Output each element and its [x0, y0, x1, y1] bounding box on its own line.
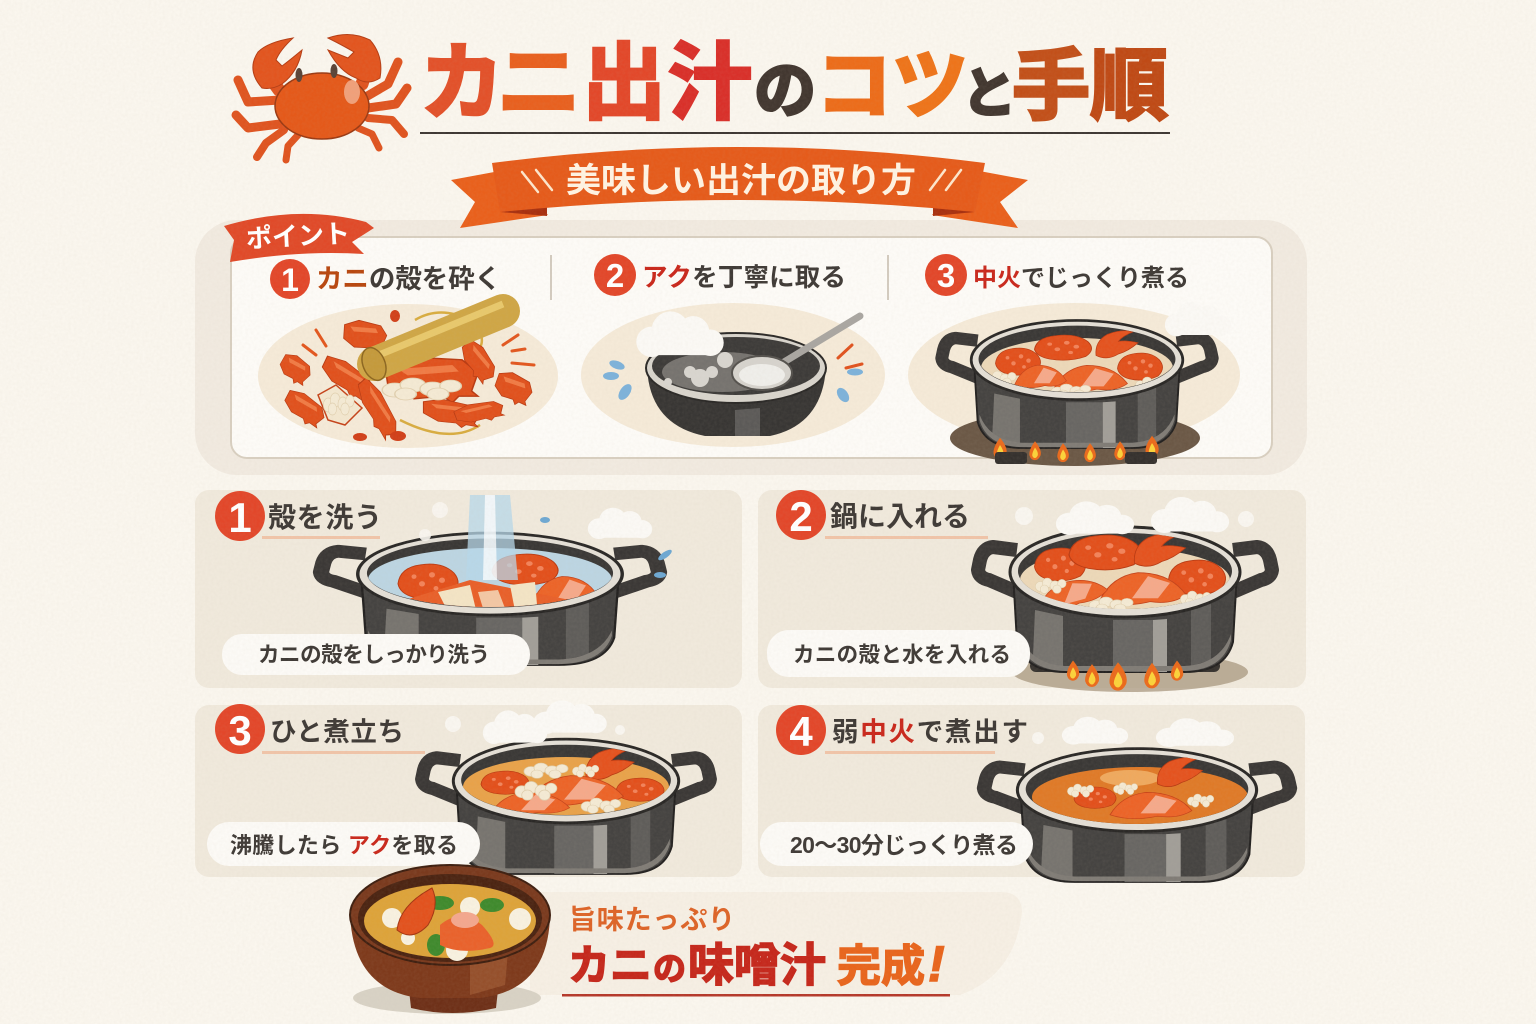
completed heading: 味噌汁: [688, 939, 826, 991]
step title: 弱中火で煮出す: [832, 717, 1028, 747]
underline: [562, 994, 950, 996]
step number: [776, 705, 826, 755]
point 3 illustration: simmering pot: [908, 302, 1240, 466]
icon: crab: [236, 34, 407, 160]
title: コ: [816, 44, 892, 129]
step number: 4: [789, 708, 813, 755]
step title: 鍋に入れる: [830, 501, 970, 532]
caption pill: カニの殻と水を入れる: [793, 643, 1011, 667]
title: 汁: [668, 36, 752, 130]
card: step 3: [195, 700, 742, 877]
panel: finished miso soup: [530, 892, 1022, 996]
point 2 illustration: skimming: [581, 303, 885, 447]
icon: miso soup bowl: [350, 865, 550, 1014]
point 2 heading: アクを丁寧に取る: [642, 264, 846, 292]
illustration: pot on burner: [978, 497, 1272, 692]
underline: [825, 751, 995, 754]
step title: 殻を洗う: [268, 502, 382, 533]
panel: points: [195, 214, 1307, 475]
underline: [262, 536, 380, 539]
underline: [825, 536, 988, 539]
step title: ひと煮立ち: [270, 717, 404, 747]
title: [420, 36, 1168, 130]
step number: 3: [228, 707, 252, 754]
card: step 4: [758, 705, 1305, 882]
completed heading: カニ: [568, 942, 652, 989]
caption pill: カニの殻をしっかり洗う: [258, 643, 490, 667]
illustration: simmering broth: [984, 717, 1290, 882]
point 2 heading: [594, 254, 846, 296]
illustration: boiling pot: [422, 700, 710, 874]
point 2 heading: 2: [606, 257, 624, 294]
title: の: [754, 57, 816, 126]
completed heading: [568, 936, 945, 992]
caption pill: 沸騰したら アクを取る: [230, 833, 458, 858]
banner: subtitle ribbon: [451, 147, 1028, 228]
badge: point: [224, 214, 374, 262]
caption pill: [222, 634, 530, 675]
caption pill: [760, 822, 1033, 866]
step number: [215, 704, 265, 754]
completed heading: !: [928, 936, 945, 992]
badge: point: ポイント: [245, 218, 351, 254]
title rule: [420, 132, 1170, 134]
completed heading: の: [653, 950, 686, 987]
point 3 heading: [925, 254, 1189, 296]
step number: [776, 490, 826, 540]
card: step 1: [195, 490, 742, 688]
step number: 2: [789, 493, 813, 540]
title: カ: [420, 36, 504, 130]
underline: [262, 751, 425, 754]
point 1 illustration: crushing shells: [258, 304, 558, 448]
step number: 1: [228, 494, 252, 541]
title: ニ: [497, 36, 581, 130]
completed heading: 完成: [837, 942, 925, 991]
title: 順: [1090, 42, 1168, 130]
title: ツ: [892, 44, 968, 129]
illustration: washing shells: [321, 495, 673, 665]
point 3 heading: 中火でじっくり煮る: [973, 265, 1189, 292]
point 1 heading: カニの殻を砕く: [316, 264, 501, 294]
banner: subtitle ribbon: 美味しい出汁の取り方: [566, 162, 916, 200]
caption pill: [767, 630, 1030, 677]
title: と: [962, 64, 1016, 124]
title: 出: [582, 36, 666, 130]
caption pill: 20〜30分じっくり煮る: [790, 832, 1018, 858]
point 1 heading: [270, 259, 501, 299]
divider: [550, 255, 552, 300]
card: step 2: [758, 490, 1306, 692]
title: 手: [1012, 42, 1090, 130]
step number: [215, 491, 265, 541]
divider: [887, 255, 889, 300]
point 1 heading: 1: [281, 262, 299, 298]
sub heading: 旨味たっぷり: [569, 905, 735, 935]
caption pill: [207, 822, 480, 866]
point 3 heading: 3: [937, 257, 955, 294]
